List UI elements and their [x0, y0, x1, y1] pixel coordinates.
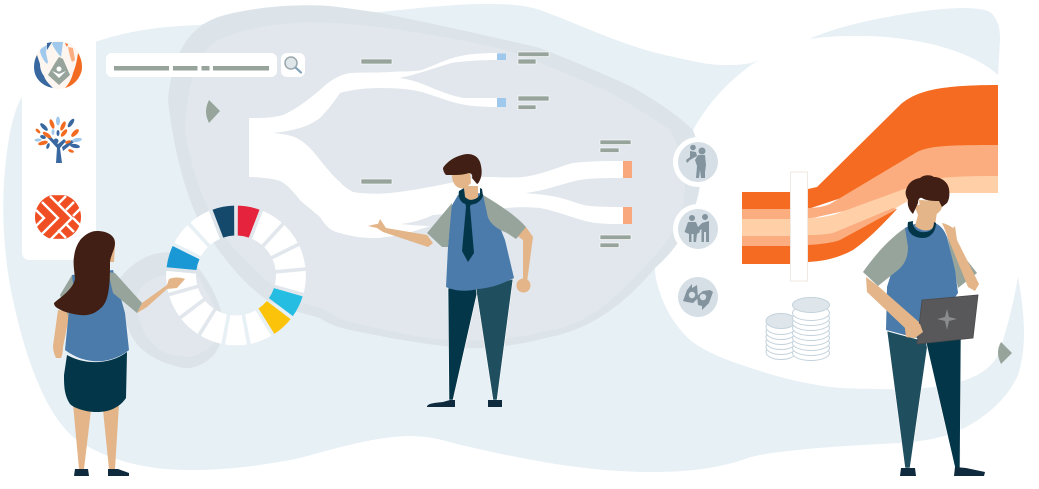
logo: red woven circle — [35, 194, 81, 240]
sankey blue nodes — [497, 54, 506, 107]
grey band shape — [168, 5, 701, 348]
coins: front stack — [792, 298, 830, 360]
arrow left — [206, 100, 220, 123]
white region: right — [655, 36, 1039, 389]
sankey flows: left white — [249, 53, 623, 238]
inner grey shape — [185, 22, 685, 341]
orange sankey: left block — [742, 192, 790, 264]
person: presenter man — [368, 154, 533, 407]
icon circle: sign language — [678, 277, 718, 317]
goals wheel — [165, 205, 307, 345]
icon circle: two people — [673, 204, 723, 254]
orange sankey: right flows — [808, 85, 998, 262]
search button — [281, 53, 305, 77]
logo: tree — [34, 116, 82, 163]
icon circle: parent and child — [673, 137, 723, 187]
sankey orange nodes — [623, 161, 632, 224]
logo: figure in tree circle — [34, 41, 82, 89]
sankey post — [790, 172, 808, 281]
ring behind wheel — [120, 252, 223, 368]
search box — [106, 53, 277, 77]
person: woman at wheel — [53, 231, 185, 476]
ring inner — [137, 273, 220, 357]
coins: back stack — [766, 314, 796, 360]
left logo panel — [22, 22, 96, 260]
person: man with laptop — [863, 175, 985, 476]
sankey node labels — [361, 52, 631, 248]
arrow right — [998, 342, 1012, 364]
